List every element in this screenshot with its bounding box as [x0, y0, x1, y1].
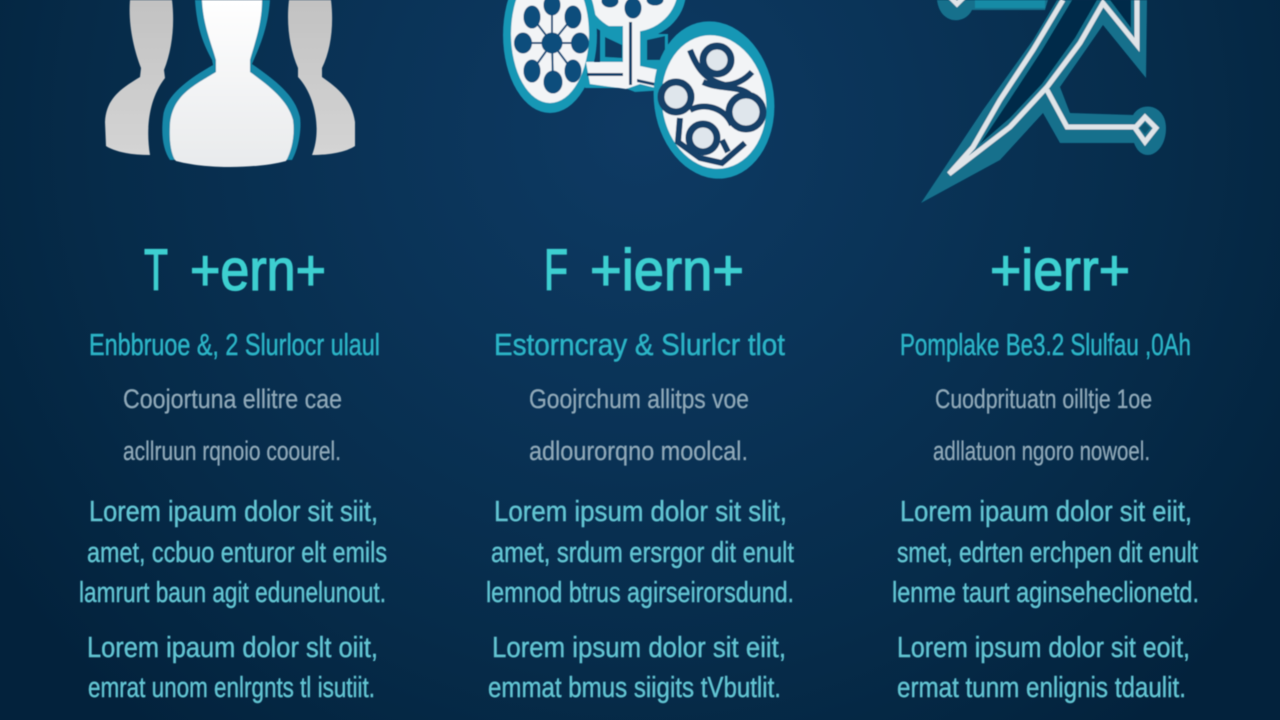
icon: circuit arrow [921, 0, 1166, 203]
heading: T [144, 238, 168, 303]
body text: Lorem ipaum dolor sit siit, [89, 496, 378, 528]
body text [79, 496, 387, 704]
panel: column 3 [892, 0, 1199, 704]
panel: column 1 [79, 0, 387, 704]
body text: emmat bmus siigits tVbutlit. [488, 672, 781, 704]
heading: +ierr+ [990, 238, 1130, 303]
heading [144, 238, 326, 303]
body text: ermat tunm enlignis tdaulit. [897, 672, 1186, 704]
body text: amet, ccbuo enturor elt emils [87, 537, 387, 569]
body text: Lorem ipaum dolor slt oiit, [87, 632, 378, 664]
icon: connected network circles [503, 0, 784, 187]
subheading: Estorncray & Slurlcr tlot [494, 327, 785, 362]
gray description: adllatuon ngoro nowoel. [933, 436, 1150, 466]
body text: Lorem ipsum dolor sit slit, [494, 496, 787, 528]
body text: lenme taurt aginseheclionetd. [892, 577, 1199, 609]
body text: lamrurt baun agit edunelunout. [79, 577, 386, 609]
body text: amet, srdum ersrgor dit enult [491, 537, 794, 569]
gray description: Goojrchum allitps voe [529, 384, 749, 414]
gray description [933, 384, 1152, 466]
subheading: Enbbruoe &, 2 Slurlocr ulaul [89, 327, 380, 362]
body text [892, 496, 1199, 704]
gray description: adlourorqno moolcal. [529, 436, 748, 466]
panel: column 2 [486, 0, 794, 704]
heading: +ern+ [190, 238, 326, 303]
heading: F [544, 238, 568, 303]
gray description: acllruun rqnoio coourel. [123, 436, 341, 466]
body text [486, 496, 794, 704]
gray description: Cuodprituatn oilltje 1oe [935, 384, 1152, 414]
heading: +iern+ [590, 238, 744, 303]
body text: lemnod btrus agirseirorsdund. [486, 577, 794, 609]
body text: smet, edrten erchpen dit enult [897, 537, 1198, 569]
icon: group of people [105, 0, 355, 167]
body text: emrat unom enlrgnts tl isutiit. [88, 672, 375, 704]
body text: Lorem ipsum dolor sit eoit, [897, 632, 1190, 664]
gray description [529, 384, 749, 466]
body text: Lorem ipaum dolor sit eiit, [900, 496, 1192, 528]
body text: Lorem ipsum dolor sit eiit, [492, 632, 786, 664]
gray description [123, 384, 342, 466]
gray description: Coojortuna ellitre cae [123, 384, 342, 414]
